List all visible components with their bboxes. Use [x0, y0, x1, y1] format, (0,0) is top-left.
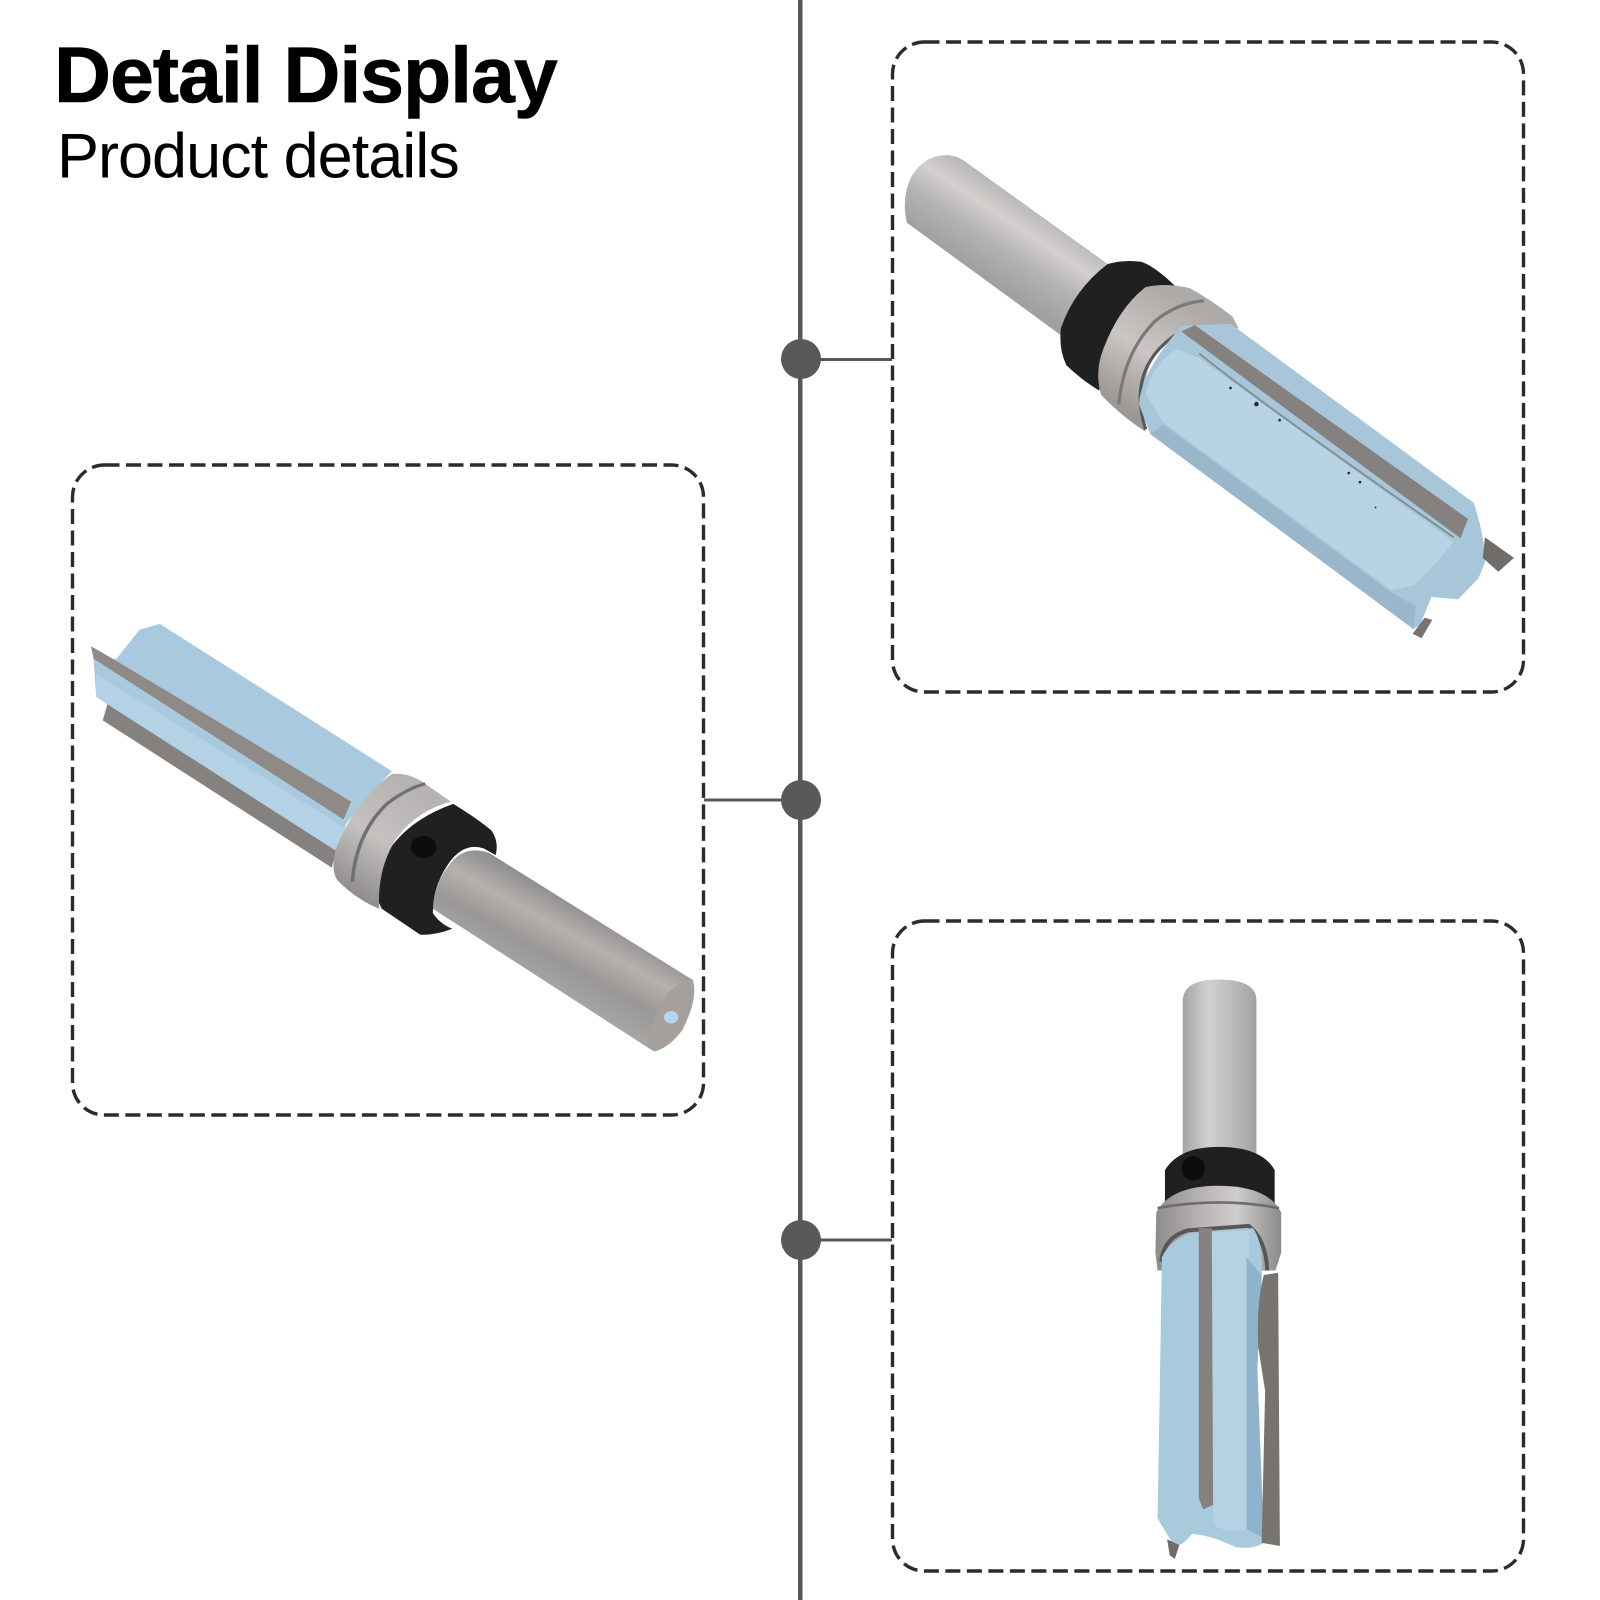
- subheading: Product details: Product details: [57, 122, 459, 192]
- router bit upright, shank at top: [1155, 979, 1281, 1559]
- connector: node 2 to left panel: [704, 780, 821, 820]
- panel: bottom right detail view: [892, 921, 1524, 1571]
- router bit angled, shank end lower right: [91, 624, 694, 1052]
- panel: left detail view: [72, 465, 704, 1115]
- connector: node 3 to bottom panel: [781, 1220, 892, 1260]
- router bit angled, cutting end lower right: [905, 155, 1514, 638]
- title block: [54, 30, 558, 192]
- vertical timeline spine: [798, 0, 802, 1600]
- heading: Detail Display: Detail Display: [54, 30, 558, 119]
- panel: top right detail view: [892, 42, 1524, 692]
- connector: node 1 to top panel: [781, 339, 892, 379]
